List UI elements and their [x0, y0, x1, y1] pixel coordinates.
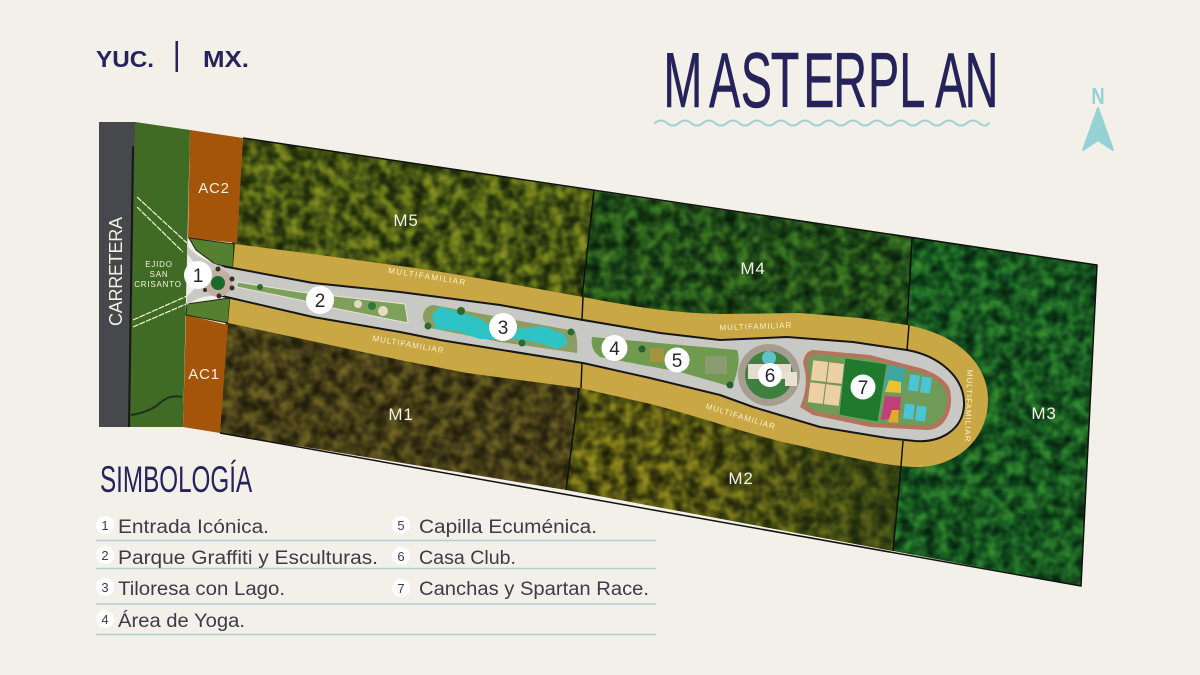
marker 6: 6 — [765, 366, 775, 387]
marker 4 — [602, 335, 628, 361]
masterplan map — [99, 120, 1110, 600]
entry lawns — [186, 238, 234, 323]
marker 1 — [184, 261, 212, 289]
title wave underline — [655, 120, 989, 126]
forest lot M2 — [566, 388, 900, 551]
lot labels: M5 — [393, 211, 419, 230]
roundabout — [203, 266, 234, 298]
marker 5: 5 — [672, 351, 682, 372]
pools — [903, 374, 932, 422]
forest lot M1 — [220, 323, 578, 490]
median: tiloresa lake — [423, 305, 577, 353]
green strip: Ejido San Crisanto — [129, 122, 190, 427]
marker 3: 3 — [498, 318, 508, 339]
legend item 3: 3 — [101, 580, 109, 595]
marker 2: 2 — [315, 291, 325, 312]
highway strip: carretera: CARRETERA — [106, 217, 126, 326]
soccer field — [839, 358, 887, 422]
median: graffiti and sculpture park — [237, 282, 408, 323]
multifamiliar band — [228, 244, 988, 467]
lot outlines — [220, 138, 1097, 586]
legend item 6: 6 — [397, 549, 405, 564]
marker 7: 7 — [858, 378, 868, 399]
lot AC2: AC2 — [198, 180, 230, 197]
legend — [96, 516, 656, 634]
location label: YUC. | MX.: MX. — [203, 46, 249, 72]
band labels: multifamiliar: MULTIFAMILIAR — [372, 334, 445, 355]
legend item 6: Casa Club. — [419, 548, 516, 569]
marker 6 — [758, 363, 782, 387]
marker 3 — [489, 313, 517, 341]
icon: north arrow: N — [1091, 84, 1105, 110]
road loop — [222, 266, 964, 441]
title: MASTERPLAN: MASTERPLAN — [663, 37, 998, 124]
lot labels: M1 — [388, 405, 414, 424]
forest lot M3 — [893, 238, 1096, 586]
marker 2 — [306, 286, 334, 314]
lot AC2 — [188, 130, 243, 243]
highway strip: carretera — [99, 122, 136, 427]
marker 7 — [850, 374, 876, 400]
legend item 5: 5 — [397, 518, 405, 533]
lot labels: M2 — [728, 469, 754, 488]
legend item 7: 7 — [397, 581, 405, 596]
icon: north arrow — [1083, 84, 1113, 150]
legend item 2: Parque Graffiti y Esculturas. — [118, 548, 378, 569]
dividers across bands — [581, 297, 909, 466]
location label: YUC. | MX. — [96, 41, 249, 72]
marker 4: 4 — [609, 339, 620, 360]
median: yoga area and chapel gardens — [592, 337, 739, 388]
forest lot M5 — [232, 138, 594, 297]
lot labels: M4 — [740, 259, 766, 278]
playground colours — [883, 365, 905, 393]
legend item 4: Área de Yoga. — [118, 611, 245, 632]
green strip: Ejido San Crisanto: EJIDO — [145, 260, 173, 269]
location label: YUC. | MX.: YUC. — [96, 46, 154, 72]
lot AC1: AC1 — [188, 366, 220, 383]
marker 1: 1 — [193, 266, 203, 287]
band labels: multifamiliar — [372, 266, 974, 443]
lot labels — [388, 211, 1057, 488]
legend item 1: Entrada Icónica. — [118, 517, 269, 538]
legend item 4: 4 — [101, 612, 109, 627]
band labels: multifamiliar: MULTIFAMILIAR — [719, 321, 792, 332]
club house circle — [738, 344, 800, 406]
legend item 3: Tiloresa con Lago. — [118, 579, 285, 600]
tennis courts — [808, 360, 844, 406]
lot labels: M3 — [1031, 404, 1057, 423]
legend item 5: Capilla Ecuménica. — [419, 517, 597, 538]
legend item 1: 1 — [101, 518, 109, 533]
forest lot M4 — [582, 191, 912, 325]
green strip: Ejido San Crisanto: SAN — [150, 270, 168, 279]
entry flare road — [187, 245, 224, 305]
band labels: multifamiliar: MULTIFAMILIAR — [705, 402, 777, 432]
legend rules — [96, 540, 656, 634]
green strip: Ejido San Crisanto: CRISANTO — [134, 280, 182, 289]
marker 5 — [664, 348, 690, 372]
legend item 7: Canchas y Spartan Race. — [419, 579, 649, 600]
lot AC1 — [183, 315, 228, 433]
sports area — [800, 350, 951, 430]
legend heading: SIMBOLOGÍA: SIMBOLOGÍA — [100, 459, 252, 500]
legend item 2: 2 — [101, 548, 109, 563]
band labels: multifamiliar: MULTIFAMILIAR — [387, 266, 467, 287]
band labels: multifamiliar: MULTIFAMILIAR — [963, 370, 974, 443]
